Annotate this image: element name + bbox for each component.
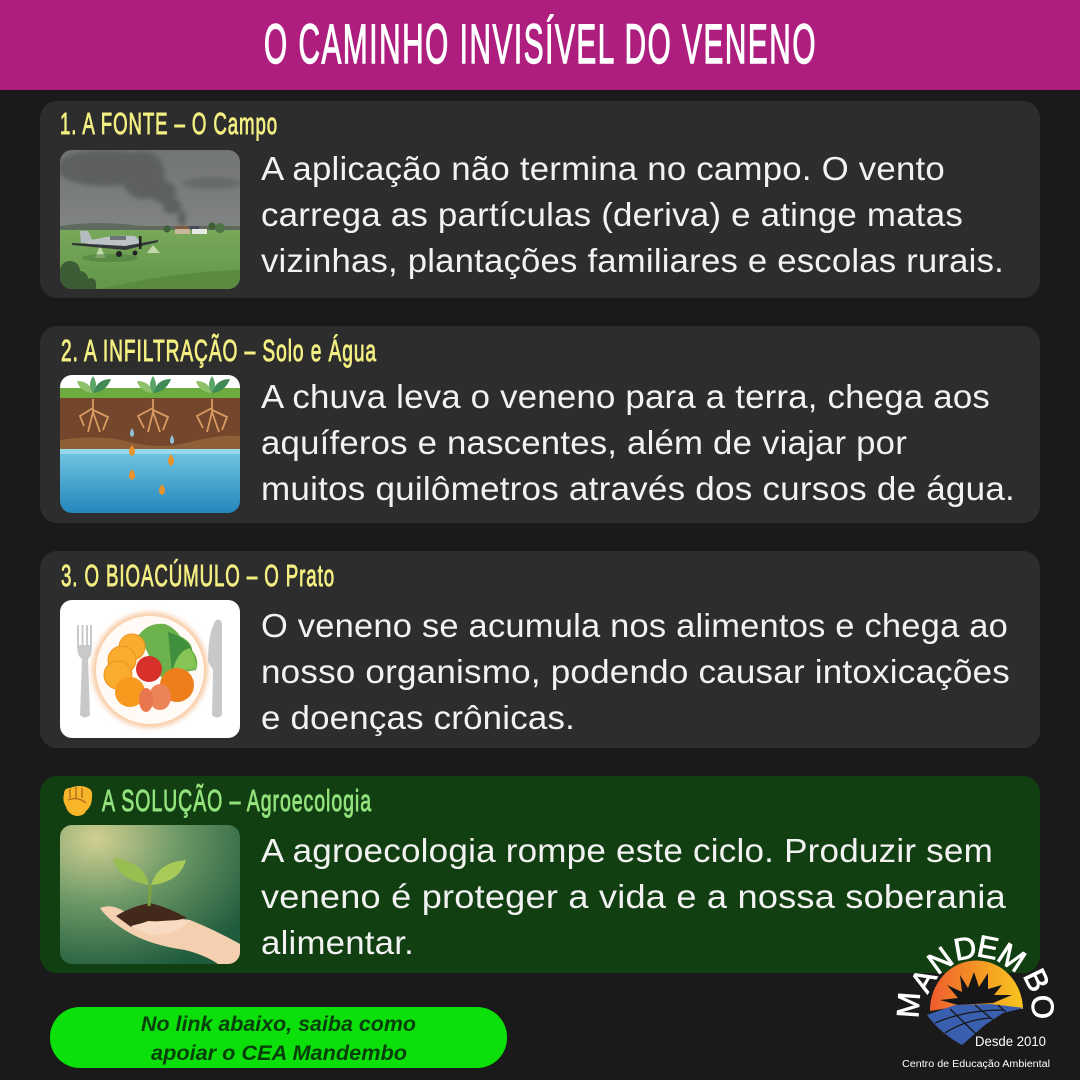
call to action pill: No link abaixo, saiba como [141,1013,416,1036]
body text: a fonte: carrega as partículas (deriva) e atinge matas [261,196,963,233]
panel: a solução [40,776,1040,973]
body text: a solução: A agroecologia rompe este ciclo. Produzir sem [261,832,993,869]
body text: a fonte: vizinhas, plantações familiares e escolas rurais. [261,242,1004,279]
heading: a fonte: 1. A FONTE – O Campo [60,106,278,141]
title banner [0,0,1080,90]
logo sun rays [940,972,1012,1005]
logo wordmark: D [951,929,979,968]
image: plate of food [60,600,240,738]
logo sun [930,960,1023,1011]
logo tagline: Desde 2010 [975,1033,1046,1049]
plane [72,231,158,257]
logo solar panels [927,1004,1024,1045]
body text: a solução: veneno é proteger a vida e a nossa soberania [261,878,1006,915]
body text: o bioacúmulo: nosso organismo, podendo causar intoxicações [261,653,1010,690]
logo wordmark [890,928,1061,1020]
call to action pill [50,1007,507,1068]
logo wordmark: O [1024,994,1061,1020]
logo wordmark: N [921,940,960,981]
body text: a infiltração: A chuva leva o veneno para a terra, chega aos [261,378,990,415]
body text: o bioacúmulo: O veneno se acumula nos alimentos e chega ao [261,607,1008,644]
body text: a infiltração: muitos quilômetros através dos cursos de água. [261,470,1015,507]
logo wordmark: B [1016,963,1057,997]
heading: o bioacúmulo: 3. O BIOACÚMULO – O Prato [61,558,335,593]
body text: a fonte [261,150,1004,279]
call to action pill: apoiar o CEA Mandembo [151,1042,407,1065]
icon: raised fist [63,786,92,816]
body text: a solução: alimentar. [261,924,414,961]
panel: 2. A infiltração [40,326,1040,523]
image: seedling in cupped hand [60,825,240,964]
panel: 3. O bioacúmulo [40,551,1040,748]
logo subtitle: Centro de Educação Ambiental [902,1059,1050,1070]
logo wordmark: M [991,936,1032,979]
logo wordmark: E [974,928,1001,967]
heading: a solução: A SOLUÇÃO – Agroecologia [102,783,372,818]
image: crop-dusting plane over field [55,150,242,292]
image: soil and water cross-section [60,375,240,513]
body text: o bioacúmulo: e doenças crônicas. [261,699,575,736]
body text: o bioacúmulo [261,607,1010,736]
logo wordmark: M [890,991,927,1019]
body text: a fonte: A aplicação não termina no campo. O vento [261,150,945,187]
panel: 1. A fonte [40,101,1040,298]
heading: a infiltração: 2. A INFILTRAÇÃO – Solo e Água [61,333,377,368]
body text: a infiltração [261,378,1015,507]
body text: a solução [261,832,1006,961]
logo: Mandembo [890,928,1061,1070]
logo wordmark: A [903,962,944,998]
body text: a infiltração: aquíferos e nascentes, além de viajar por [261,424,907,461]
